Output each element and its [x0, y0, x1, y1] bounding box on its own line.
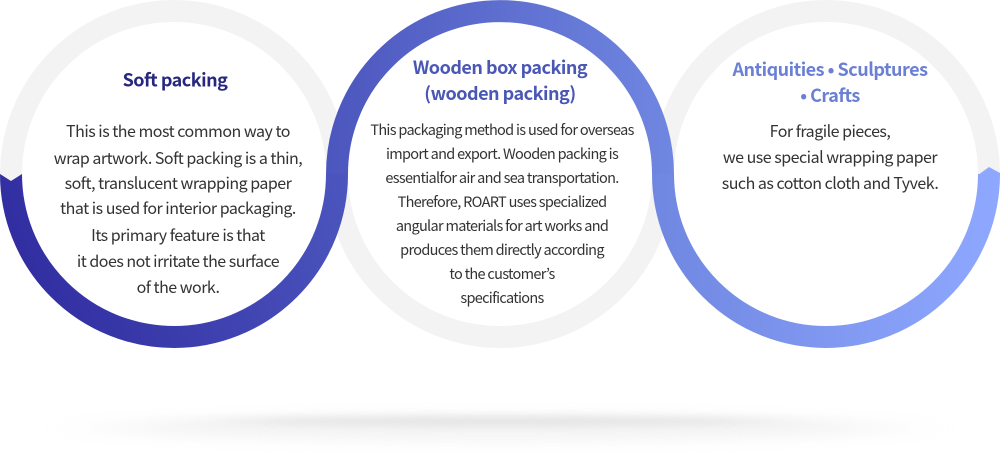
ring 1 coloured lower arc: [0, 173, 337, 337]
body text: soft packing: [54, 118, 302, 298]
heading: wooden box packing: (wooden packing): [424, 80, 576, 106]
body text: wooden box packing: produces them directly according: [400, 239, 604, 260]
body text: wooden box packing: This packaging method is used for overseas: [370, 119, 635, 140]
body text: soft packing: it does not irritate the surface: [77, 248, 280, 272]
heading: soft packing: Soft packing: [123, 66, 228, 92]
heading: antiquities sculptures crafts: Antiquities • Sculptures: [732, 56, 928, 82]
grey base rings: [11, 11, 989, 337]
body text: antiquities sculptures crafts: such as cotton cloth and Tyvek.: [722, 170, 938, 194]
ring 3 coloured lower arc with arrow tip: [663, 167, 1000, 337]
body text: soft packing: Its primary feature is that: [91, 222, 265, 246]
body text: wooden box packing: [370, 119, 635, 308]
heading: antiquities sculptures crafts: • Crafts: [800, 82, 860, 108]
panel: antiquities sculptures crafts: [722, 56, 938, 194]
body text: wooden box packing: Therefore, ROART uses specialized: [398, 191, 606, 212]
body text: antiquities sculptures crafts: [722, 118, 938, 194]
panel: soft packing: [54, 66, 302, 298]
body text: wooden box packing: essentialfor air and sea transportation.: [385, 167, 619, 188]
body text: soft packing: of the work.: [137, 274, 219, 298]
heading: wooden box packing: Wooden box packing: [413, 54, 587, 80]
ring 2 coloured upper arc: [337, 11, 663, 174]
body text: wooden box packing: to the customer’s: [449, 263, 555, 284]
body text: soft packing: This is the most common way to: [66, 118, 290, 142]
panel: wooden box packing: [370, 54, 635, 308]
body text: antiquities sculptures crafts: we use special wrapping paper: [723, 144, 938, 168]
ground shadow: [100, 415, 900, 441]
body text: wooden box packing: angular materials for art works and: [396, 215, 608, 236]
body text: wooden box packing: import and export. Wooden packing is: [386, 143, 619, 164]
body text: antiquities sculptures crafts: For fragile pieces,: [770, 118, 890, 142]
body text: soft packing: soft, translucent wrapping paper: [65, 170, 293, 194]
body text: wooden box packing: specifications: [460, 287, 545, 308]
body text: soft packing: wrap artwork. Soft packing is a thin,: [54, 145, 302, 169]
body text: soft packing: that is used for interior packaging.: [60, 195, 296, 219]
